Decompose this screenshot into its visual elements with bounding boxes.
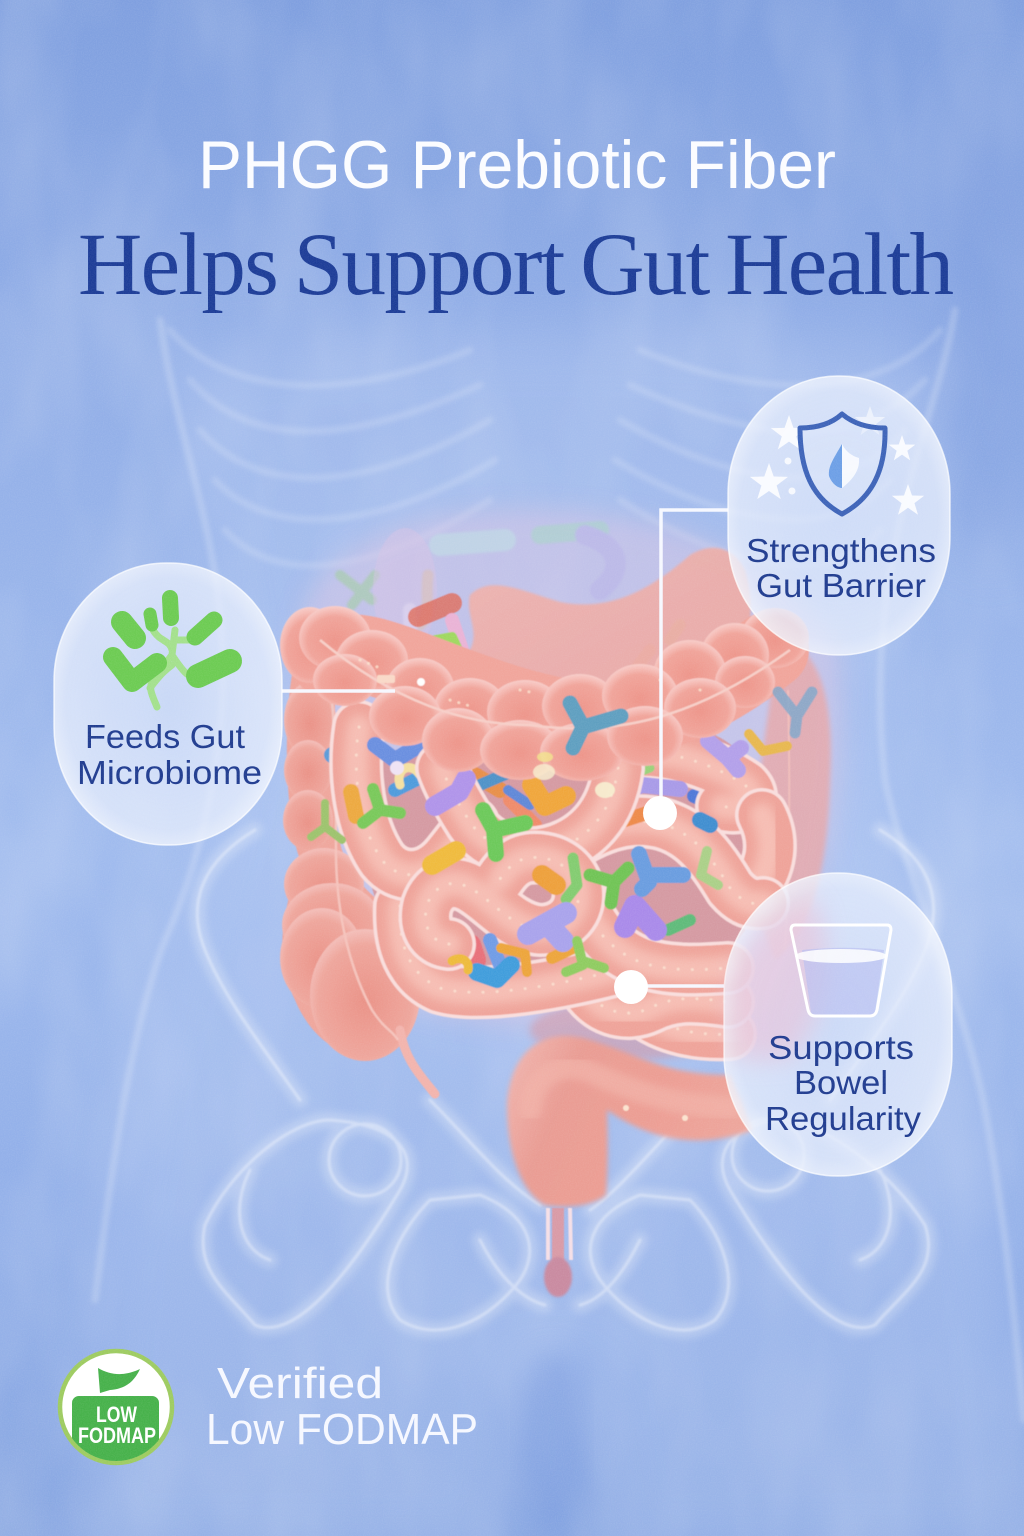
rectum <box>507 1036 752 1207</box>
anal canal <box>544 1205 572 1297</box>
icon: green bacteria cluster <box>113 598 230 707</box>
faded upper bacteria <box>340 530 680 690</box>
bacteria in front of loops <box>311 741 741 979</box>
panel: Strengthens Gut Barrier <box>728 376 950 655</box>
small intestine loops <box>356 727 770 1034</box>
icon: shield with stars <box>750 406 924 515</box>
pink bacterium upper <box>418 603 452 617</box>
cream highlights <box>377 675 615 798</box>
label: Feeds Gut Microbiome: Feeds Gut <box>85 718 245 755</box>
bacteria behind loops <box>332 723 787 960</box>
icon: glass of water <box>791 925 891 1016</box>
green panel <box>72 1396 159 1461</box>
transverse colon <box>280 606 809 781</box>
pale sac <box>373 528 437 652</box>
stomach <box>451 548 751 715</box>
badge text: LOW: LOW <box>96 1402 137 1427</box>
teal Y bacterium on colon <box>570 703 621 748</box>
ghost ribcage <box>170 330 940 566</box>
panel: Supports Bowel Regularity <box>724 873 952 1176</box>
faint Y bacterium right <box>778 692 812 733</box>
seam on right colon <box>785 690 789 950</box>
purple-pink bacterium upper <box>452 620 462 650</box>
label: Supports Bowel Regularity: Regularity <box>765 1100 922 1137</box>
label: Supports Bowel Regularity: Bowel <box>794 1064 888 1101</box>
front small intestine loops <box>426 768 728 970</box>
ascending colon <box>280 640 435 1094</box>
ghost pelvis <box>197 830 934 1330</box>
translucent torso silhouette <box>75 310 1024 1536</box>
right colon descending <box>745 640 831 960</box>
abdominal cavity glow <box>298 508 842 1030</box>
label: Strengthens Gut Barrier: Gut Barrier <box>756 567 926 604</box>
label: Verified Low FODMAP: Low FODMAP <box>206 1405 478 1454</box>
title line: PHGG Prebiotic Fiber: PHGG Prebiotic Fiber <box>198 127 836 203</box>
dark base behind small intestine <box>345 730 775 1009</box>
illustration: large intestine and small intestine <box>280 508 842 1297</box>
label: Strengthens Gut Barrier: Strengthens <box>746 532 936 569</box>
bacteria between loops <box>375 745 710 872</box>
panel: Feeds Gut Microbiome <box>54 563 282 845</box>
title line: Helps Support Gut Health: Helps Support Gut Health <box>78 216 954 314</box>
label: Verified Low FODMAP: Verified <box>217 1359 383 1408</box>
label: Feeds Gut Microbiome: Microbiome <box>77 754 262 791</box>
connector: Supports Bowel Regularity <box>614 970 724 1004</box>
label: Supports Bowel Regularity: Supports <box>768 1029 914 1066</box>
green bacterium upper <box>414 637 458 650</box>
badge text: FODMAP: FODMAP <box>78 1423 156 1448</box>
connector: Feeds Gut Microbiome <box>282 689 395 693</box>
connector: Strengthens Gut Barrier <box>643 510 728 830</box>
icon: leaf <box>98 1368 140 1393</box>
tint of organs behind glass <box>728 900 826 1060</box>
badge: Low FODMAP <box>60 1351 172 1471</box>
pelvic reddish shade <box>530 1000 730 1060</box>
